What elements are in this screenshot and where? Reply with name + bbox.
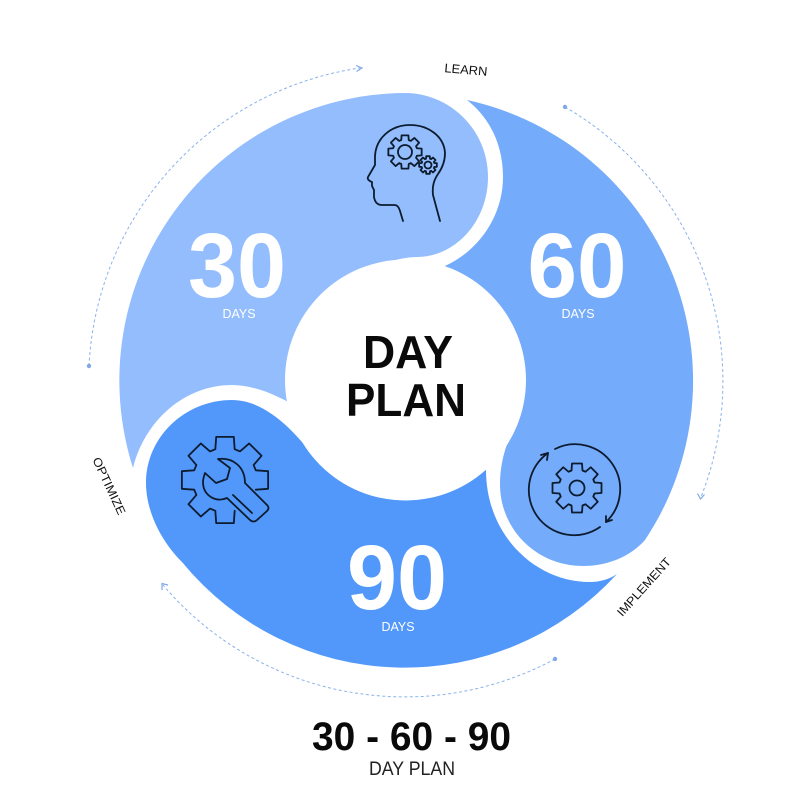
label: learn: LEARN bbox=[444, 61, 488, 79]
number: 60 days: DAYS bbox=[561, 307, 595, 321]
segment: 30 days (light blue) bbox=[119, 93, 488, 468]
number: 90 days: 90 bbox=[347, 527, 447, 629]
center title: day plan bbox=[346, 326, 466, 426]
gear large bbox=[388, 135, 422, 169]
number: 60 days: 60 bbox=[528, 215, 626, 317]
number: 30 days: DAYS bbox=[222, 307, 256, 321]
footer title: 30 - 60 - 90: 30 - 60 - 90 bbox=[312, 715, 511, 759]
center circle bbox=[285, 260, 526, 500]
center title: day plan: PLAN bbox=[346, 374, 466, 426]
icon: head with gears bbox=[368, 125, 445, 221]
dashed arrow: right bbox=[563, 105, 723, 499]
dashed arrow: top left bbox=[87, 66, 362, 368]
footer subtitle: day plan: DAY PLAN bbox=[369, 759, 455, 780]
dashed arrow: bottom bbox=[162, 584, 557, 697]
segment: 60 days (medium blue) bbox=[445, 100, 693, 566]
icon: gear with wrench bbox=[182, 437, 268, 523]
label: optimize: OPTIMIZE bbox=[90, 455, 128, 517]
center title: day plan: DAY bbox=[363, 326, 453, 378]
gear small bbox=[419, 156, 437, 174]
icon: gear with cycle arrows bbox=[529, 444, 620, 535]
number: 90 days: DAYS bbox=[381, 620, 415, 634]
segment: 90 days (dark blue) bbox=[146, 400, 617, 668]
label: implement: IMPLEMENT bbox=[614, 554, 674, 619]
number: 30 days: 30 bbox=[188, 215, 286, 317]
